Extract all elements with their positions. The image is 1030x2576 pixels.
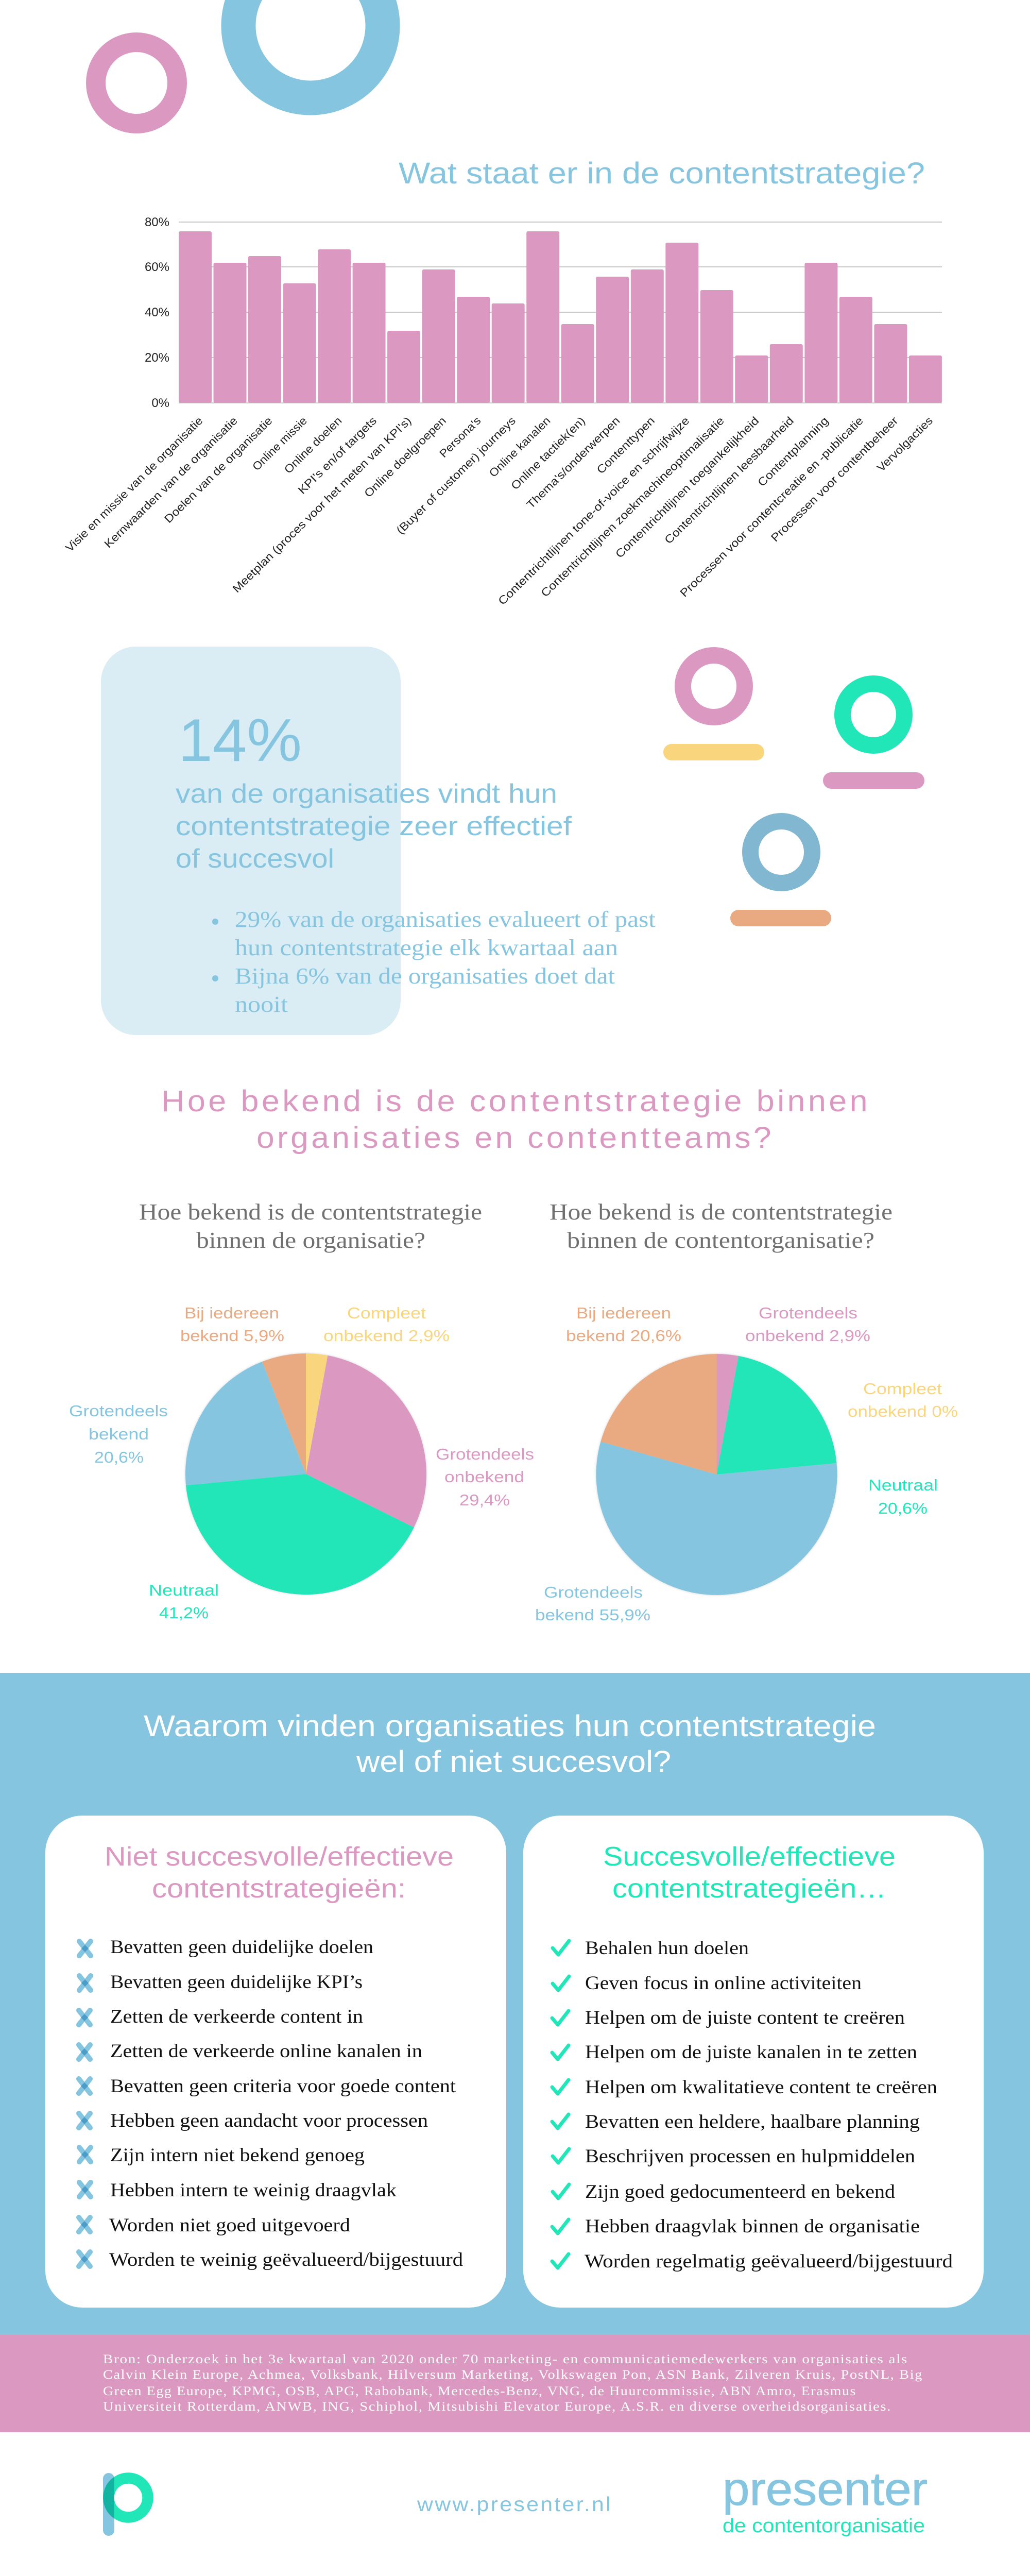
label: bij iedereen bekend: bekend 20,6% xyxy=(566,1327,681,1345)
label: neutraal xyxy=(149,1581,219,1622)
category labels: Visie en missie van de organisatie xyxy=(63,414,205,554)
list: succesvol: Zijn goed gedocumenteerd en bekend xyxy=(585,2181,896,2202)
list: niet succesvol: Hebben geen aandacht voor processen xyxy=(110,2110,428,2131)
category labels: Online doelgroepen xyxy=(362,414,449,500)
subheading: binnen de organisatie xyxy=(139,1199,482,1253)
statement text: of succesvol xyxy=(176,844,334,874)
category labels: (Buyer of customer) journeys xyxy=(394,414,518,537)
list: niet succesvol: Worden te weinig geëvalueerd/bijgestuurd xyxy=(109,2249,464,2270)
card: niet succesvol xyxy=(45,1816,506,2308)
list: niet succesvol: Bevatten geen duidelijke KPI’s xyxy=(110,1972,363,1993)
category labels: Vervolgacties xyxy=(874,414,935,474)
statement text xyxy=(176,779,572,874)
heading: hoe bekend xyxy=(161,1084,870,1155)
bullet list xyxy=(212,907,656,1017)
category labels: Online doelen xyxy=(282,414,345,476)
category labels: Contentrichtlijnen leesbaarheid xyxy=(662,414,796,547)
tagline: de contentorganisatie xyxy=(723,2515,925,2537)
panel: bron xyxy=(0,2335,1030,2432)
subheading: binnen de organisatie: binnen de organisatie? xyxy=(196,1228,425,1253)
y axis labels xyxy=(145,215,169,410)
source text: Universiteit Rotterdam, ANWB, ING, Schiphol, Mitsubishi Elevator Europe, A.S.R. en diverse overheidsorganisaties. xyxy=(103,2400,891,2414)
heading: hoe bekend: Hoe bekend is de contentstrategie binnen xyxy=(161,1084,870,1118)
list: succesvol: Behalen hun doelen xyxy=(585,1938,749,1959)
label: grotendeels onbekend: Grotendeels xyxy=(759,1304,857,1322)
category labels: Doelen van de organisatie xyxy=(162,414,275,526)
y axis labels: 80% xyxy=(145,215,169,229)
bullet list: 29% van de organisaties evalueert of past xyxy=(235,907,656,932)
icon: yellow bar xyxy=(663,744,764,760)
label: grotendeels bekend: 20,6% xyxy=(94,1448,144,1466)
source text xyxy=(103,2352,923,2414)
label: grotendeels bekend: bekend 55,9% xyxy=(535,1606,650,1624)
y axis labels: 60% xyxy=(145,260,169,274)
icon: pink ring xyxy=(683,655,745,717)
label: compleet onbekend xyxy=(848,1380,958,1420)
label: neutraal: Neutraal xyxy=(868,1476,938,1494)
label: compleet onbekend: onbekend 2,9% xyxy=(323,1327,450,1345)
subheading: binnen de contentorganisatie: binnen de contentorganisatie? xyxy=(567,1228,874,1253)
label: grotendeels bekend: bekend xyxy=(89,1425,149,1443)
decoration: rings with bars xyxy=(663,655,924,926)
heading: waarom vinden organisaties: Waarom vinden organisaties hun contentstrategie xyxy=(144,1709,876,1743)
list: succesvol: Helpen om de juiste content te creëren xyxy=(585,2007,905,2028)
category labels: Kernwaarden van de organisatie xyxy=(101,414,240,550)
panel: waarom succesvol xyxy=(0,1673,1030,2335)
category labels: Online tactiek(en) xyxy=(508,414,588,492)
bullet list: nooit xyxy=(235,992,288,1017)
list: succesvol: Beschrijven processen en hulpmiddelen xyxy=(585,2146,915,2167)
category labels: Contentplanning xyxy=(755,414,831,489)
subheading: binnen de organisatie: Hoe bekend is de contentstrategie xyxy=(139,1199,482,1225)
list: succesvol: Geven focus in online activiteiten xyxy=(585,1973,862,1994)
list: succesvol: Helpen om kwalitatieve content te creëren xyxy=(585,2077,937,2098)
list: succesvol: Hebben draagvlak binnen de organisatie xyxy=(585,2216,920,2237)
bullet list: hun contentstrategie elk kwartaal aan xyxy=(235,935,618,960)
bullet list: Bijna 6% van de organisaties doet dat xyxy=(235,963,615,989)
icon: dark blue ring xyxy=(750,821,812,883)
icon: blue ring xyxy=(238,0,383,98)
card: succesvol xyxy=(523,1816,984,2308)
card heading: contentstrategieën: xyxy=(152,1874,406,1904)
list: niet succesvol: Bevatten geen duidelijke doelen xyxy=(110,1937,373,1958)
category labels: Persona's xyxy=(437,414,484,460)
label: bij iedereen bekend xyxy=(180,1304,284,1345)
big number: 14%: 14% xyxy=(178,706,302,774)
icon: pink ring xyxy=(96,42,177,124)
card heading xyxy=(105,1842,454,1904)
label: grotendeels bekend: Grotendeels xyxy=(544,1583,643,1601)
label: bij iedereen bekend xyxy=(566,1304,681,1345)
statement text: van de organisaties vindt hun xyxy=(176,779,557,809)
label: bij iedereen bekend: Bij iedereen xyxy=(576,1304,671,1322)
label: neutraal: Neutraal xyxy=(149,1581,219,1599)
category labels: Contentrichtlijnen zoekmachineoptimalisatie xyxy=(538,414,727,600)
card heading: Succesvolle/effectieve xyxy=(603,1842,896,1872)
category labels: Contentrichtlijnen tone-of-voice en schrijfwijze xyxy=(495,414,692,607)
label: neutraal: 41,2% xyxy=(159,1604,209,1622)
category labels: Online kanalen xyxy=(487,414,553,480)
pie labels: contentorganisatie xyxy=(535,1304,958,1624)
list: niet succesvol: Zetten de verkeerde content in xyxy=(110,2006,363,2027)
icon: pink bar xyxy=(823,772,924,789)
panel: 14 procent statistiek xyxy=(101,647,656,1035)
label: grotendeels onbekend: onbekend 2,9% xyxy=(745,1327,870,1345)
list: niet succesvol: Zetten de verkeerde online kanalen in xyxy=(110,2041,422,2062)
label: neutraal: 20,6% xyxy=(878,1499,928,1517)
category labels xyxy=(63,414,935,607)
label: grotendeels bekend xyxy=(69,1402,168,1466)
category labels: Online missie xyxy=(250,414,310,473)
statement text: contentstrategie zeer effectief xyxy=(176,811,572,841)
logo wordmark: presenter xyxy=(723,2464,928,2515)
bars xyxy=(179,231,942,403)
card heading xyxy=(603,1842,896,1904)
label: neutraal xyxy=(868,1476,938,1517)
list: niet succesvol: Hebben intern te weinig draagvlak xyxy=(110,2180,397,2201)
heading: waarom vinden organisaties xyxy=(144,1709,876,1778)
card heading: Niet succesvolle/effectieve xyxy=(105,1842,454,1872)
list: succesvol: Bevatten een heldere, haalbare planning xyxy=(585,2111,920,2132)
list: succesvol: Worden regelmatig geëvalueerd/bijgestuurd xyxy=(585,2251,953,2272)
website url: www.presenter.nl xyxy=(417,2494,612,2516)
list: niet succesvol: Worden niet goed uitgevoerd xyxy=(109,2215,351,2236)
pie chart: contentorganisatie xyxy=(596,1354,837,1595)
label: grotendeels onbekend: Grotendeels xyxy=(436,1445,534,1463)
label: grotendeels onbekend: 29,4% xyxy=(459,1491,510,1509)
subheading: binnen de contentorganisatie: Hoe bekend is de contentstrategie xyxy=(550,1199,892,1225)
subheading: binnen de contentorganisatie xyxy=(550,1199,892,1253)
y axis labels: 0% xyxy=(151,396,169,410)
category labels: Contenttypen xyxy=(594,414,657,477)
list: succesvol xyxy=(585,1938,953,2272)
label: compleet onbekend: Compleet xyxy=(347,1304,426,1322)
list: niet succesvol: Zijn intern niet bekend genoeg xyxy=(110,2145,365,2166)
label: compleet onbekend: Compleet xyxy=(863,1380,942,1398)
heading: hoe bekend: organisaties en contentteams? xyxy=(256,1121,774,1155)
category labels: Contentrichtlijnen toegankelijkheid xyxy=(613,414,762,561)
check icons xyxy=(552,1941,569,2268)
decoration: top rings xyxy=(96,0,383,124)
label: grotendeels onbekend xyxy=(436,1445,534,1509)
y axis labels: 40% xyxy=(145,306,169,319)
category labels: Meetplan (proces voor het meten van KPI's) xyxy=(230,414,414,595)
list: niet succesvol xyxy=(109,1937,464,2270)
label: grotendeels bekend xyxy=(535,1583,650,1624)
pie chart: organisatie xyxy=(185,1353,426,1595)
label: bij iedereen bekend: Bij iedereen xyxy=(184,1304,279,1322)
label: grotendeels bekend: Grotendeels xyxy=(69,1402,168,1420)
list: succesvol: Helpen om de juiste kanalen in te zetten xyxy=(585,2042,917,2063)
bar chart: onderdelen contentstrategie xyxy=(63,215,942,607)
category labels: KPI's en/of targets xyxy=(296,414,379,497)
source text: Calvin Klein Europe, Achmea, Volksbank, Hilversum Marketing, Volkswagen Pon, ASN Bank, Zilveren Kruis, PostNL, Big xyxy=(103,2368,923,2382)
card heading: contentstrategieën… xyxy=(612,1874,886,1904)
list: niet succesvol: Bevatten geen criteria voor goede content xyxy=(110,2076,456,2097)
label: compleet onbekend: onbekend 0% xyxy=(848,1402,958,1420)
source text: Bron: Onderzoek in het 3e kwartaal van 2020 onder 70 marketing- en communicatiemedewerkers van organisaties als xyxy=(103,2352,908,2366)
icon: orange bar xyxy=(730,910,831,926)
y axis labels: 20% xyxy=(145,351,169,365)
label: compleet onbekend xyxy=(323,1304,450,1345)
cross icons xyxy=(79,1941,91,2266)
label: grotendeels onbekend: onbekend xyxy=(444,1468,524,1486)
category labels: Processen voor contentbeheer xyxy=(768,414,901,544)
pie labels: organisatie xyxy=(69,1304,534,1622)
heading: waarom vinden organisaties: wel of niet succesvol? xyxy=(356,1745,671,1778)
logo wordmark xyxy=(723,2464,928,2537)
label: bij iedereen bekend: bekend 5,9% xyxy=(180,1327,284,1345)
icon: green ring xyxy=(843,684,904,745)
icon: presenter logo mark xyxy=(103,2473,148,2536)
category labels: Thema's/onderwerpen xyxy=(524,414,623,511)
category labels: Processen voor contentcreatie en -publicatie xyxy=(677,414,866,600)
label: grotendeels onbekend xyxy=(745,1304,870,1345)
title: wat staat er in de contentstrategie: Wat staat er in de contentstrategie? xyxy=(399,157,925,190)
source text: Green Egg Europe, KPMG, OSB, APG, Rabobank, Mercedes-Benz, VNG, de Huurcommissie, ABN Amro, Erasmus xyxy=(103,2384,856,2398)
